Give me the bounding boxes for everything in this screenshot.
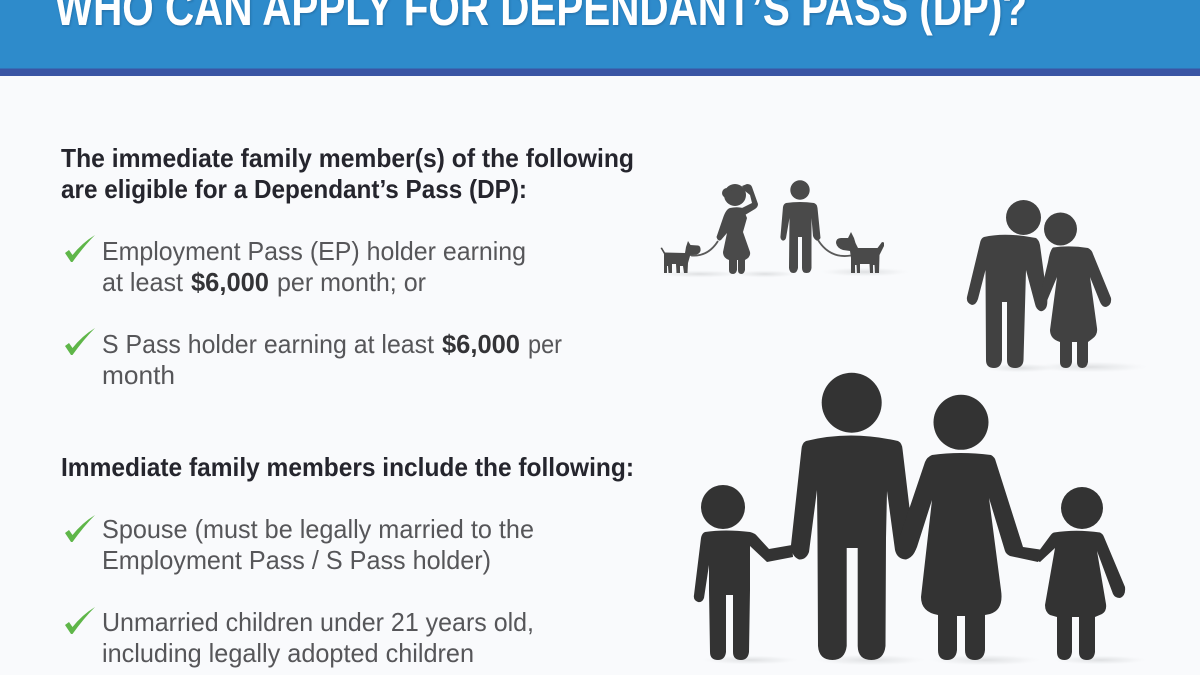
icon: dog left (660, 241, 701, 273)
list item: EP holder: $6,000 (191, 267, 269, 297)
list item: spouse: Spouse (must be legally married to the (102, 514, 534, 544)
list item: S Pass holder: per (528, 329, 562, 359)
list item: spouse: Employment Pass / S Pass holder) (102, 545, 491, 575)
list item: EP holder (65, 235, 526, 297)
icon: man (780, 180, 820, 273)
list item: children: including legally adopted children (102, 638, 474, 668)
list item: EP holder: at least (102, 267, 184, 297)
icon: people walking dogs (655, 180, 913, 278)
icon: woman (716, 184, 758, 274)
heading: eligibility (61, 143, 634, 204)
header banner (0, 0, 1200, 76)
list item: S Pass holder: month (102, 360, 175, 390)
list item: S Pass holder: S Pass holder earning at least (102, 329, 435, 359)
list item: S Pass holder: $6,000 (442, 329, 520, 359)
boy (694, 485, 793, 660)
leashes (691, 240, 851, 256)
list item: EP holder: Employment Pass (EP) holder earning (102, 236, 526, 266)
icon: couple (967, 200, 1152, 373)
icon: family of four (694, 373, 1150, 666)
heading: immediate family: Immediate family members include the following: (61, 452, 634, 482)
list item: EP holder: per month; or (277, 267, 426, 297)
woman (897, 395, 1040, 660)
list item: children: Unmarried children under 21 years old, (102, 607, 534, 637)
list item: spouse (65, 514, 534, 575)
heading: eligibility: are eligible for a Dependant’s Pass (DP): (61, 174, 527, 204)
girl (1033, 487, 1125, 660)
heading: eligibility: The immediate family member(s) of the following (61, 143, 634, 173)
man (791, 373, 917, 660)
list item: children (65, 607, 534, 668)
icon: dog right (836, 232, 884, 273)
list item: S Pass holder (65, 328, 562, 390)
